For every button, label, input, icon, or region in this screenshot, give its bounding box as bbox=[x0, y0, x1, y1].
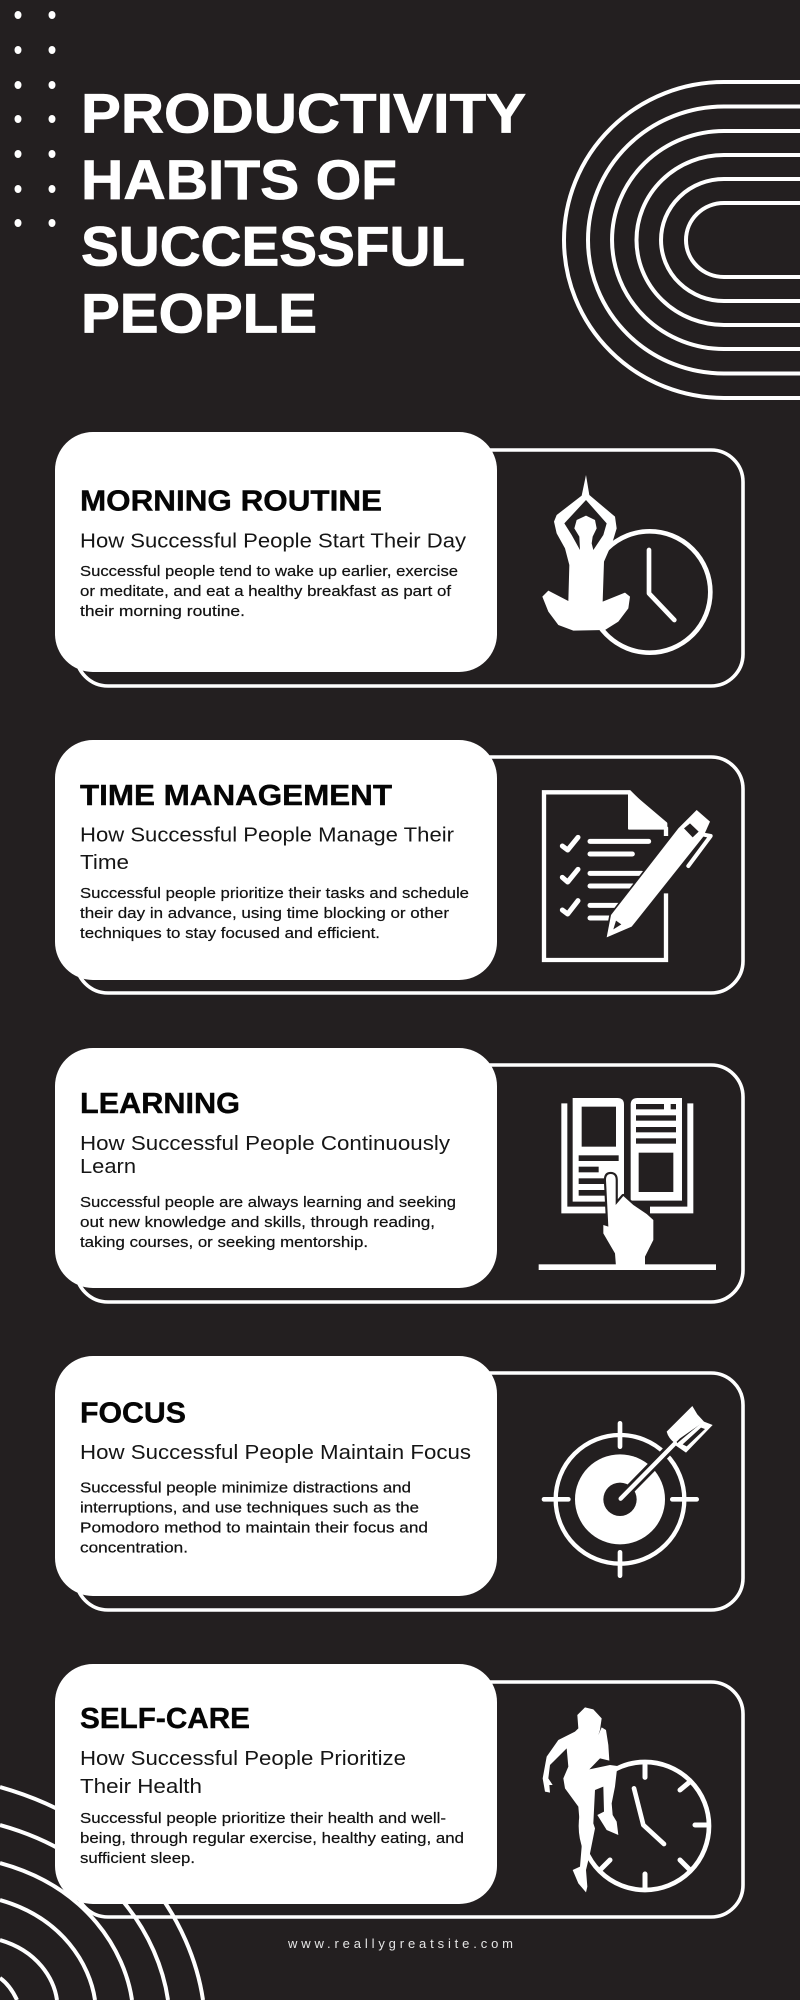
text block: learning: out new knowledge and skills, through reading, bbox=[80, 1214, 435, 1231]
title bbox=[81, 82, 526, 344]
icon: runner and clock bbox=[543, 1707, 709, 1892]
title: PEOPLE bbox=[81, 282, 317, 344]
icon: open book and pointing hand bbox=[539, 1098, 716, 1270]
title: SUCCESSFUL bbox=[81, 214, 465, 278]
subtitle: time management bbox=[80, 824, 454, 874]
text block: focus: Pomodoro method to maintain their focus and bbox=[80, 1520, 428, 1536]
heading: self-care: SELF-CARE bbox=[80, 1703, 250, 1735]
panel: learning bbox=[55, 1048, 743, 1302]
text block: self-care: Successful people prioritize their health and well- bbox=[80, 1810, 446, 1827]
heading: time management: TIME MANAGEMENT bbox=[80, 780, 392, 812]
subtitle: morning routine: How Successful People Start Their Day bbox=[80, 530, 467, 552]
text block: time management: their day in advance, using time blocking or other bbox=[80, 905, 449, 922]
text block: time management: Successful people prioritize their tasks and schedule bbox=[80, 885, 469, 902]
text block: morning routine: their morning routine. bbox=[80, 603, 245, 620]
subtitle: self-care: Their Health bbox=[80, 1775, 202, 1798]
text block: morning routine bbox=[80, 563, 458, 620]
text block: self-care: sufficient sleep. bbox=[80, 1850, 195, 1867]
text block: learning: taking courses, or seeking mentorship. bbox=[80, 1234, 368, 1251]
footer website: www.reallygreatsite.com bbox=[287, 1936, 513, 1951]
subtitle: time management: Time bbox=[80, 851, 129, 874]
icon: checklist and pen bbox=[544, 792, 711, 960]
heading: focus: FOCUS bbox=[80, 1398, 186, 1430]
subtitle: self-care bbox=[80, 1747, 406, 1798]
title: PRODUCTIVITY bbox=[81, 82, 526, 144]
subtitle: learning bbox=[80, 1132, 451, 1178]
subtitle: learning: Learn bbox=[80, 1155, 136, 1178]
decorative dot grid bbox=[14, 11, 56, 227]
icon: yoga figure and clock bbox=[542, 475, 710, 653]
decorative concentric arcs: bottom left bbox=[0, 1787, 203, 2000]
panel: time management bbox=[55, 740, 743, 993]
panel: morning routine bbox=[55, 432, 743, 686]
subtitle: self-care: How Successful People Prioritize bbox=[80, 1747, 406, 1770]
text block: focus: interruptions, and use techniques such as the bbox=[80, 1500, 419, 1516]
heading: learning: LEARNING bbox=[80, 1088, 240, 1120]
text block: learning bbox=[80, 1194, 456, 1251]
text block: morning routine: or meditate, and eat a healthy breakfast as part of bbox=[80, 583, 452, 600]
text block: focus bbox=[80, 1480, 428, 1556]
panel: self-care bbox=[55, 1664, 743, 1917]
text block: morning routine: Successful people tend to wake up earlier, exercise bbox=[80, 563, 458, 580]
text block: learning: Successful people are always learning and seeking bbox=[80, 1194, 456, 1211]
subtitle: time management: How Successful People Manage Their bbox=[80, 824, 454, 846]
decorative concentric arcs: top right bbox=[564, 82, 800, 398]
text block: time management bbox=[80, 885, 469, 942]
text block: focus: Successful people minimize distractions and bbox=[80, 1480, 411, 1496]
text block: self-care: being, through regular exercise, healthy eating, and bbox=[80, 1830, 464, 1847]
subtitle: focus: How Successful People Maintain Focus bbox=[80, 1441, 471, 1464]
icon: target and arrow bbox=[544, 1406, 713, 1576]
heading: morning routine: MORNING ROUTINE bbox=[80, 486, 382, 518]
subtitle: learning: How Successful People Continuously bbox=[80, 1132, 451, 1155]
text block: self-care bbox=[80, 1810, 464, 1867]
title: HABITS OF bbox=[81, 148, 397, 211]
text block: time management: techniques to stay focused and efficient. bbox=[80, 925, 380, 942]
text block: focus: concentration. bbox=[80, 1540, 188, 1556]
panel: focus bbox=[55, 1356, 743, 1610]
